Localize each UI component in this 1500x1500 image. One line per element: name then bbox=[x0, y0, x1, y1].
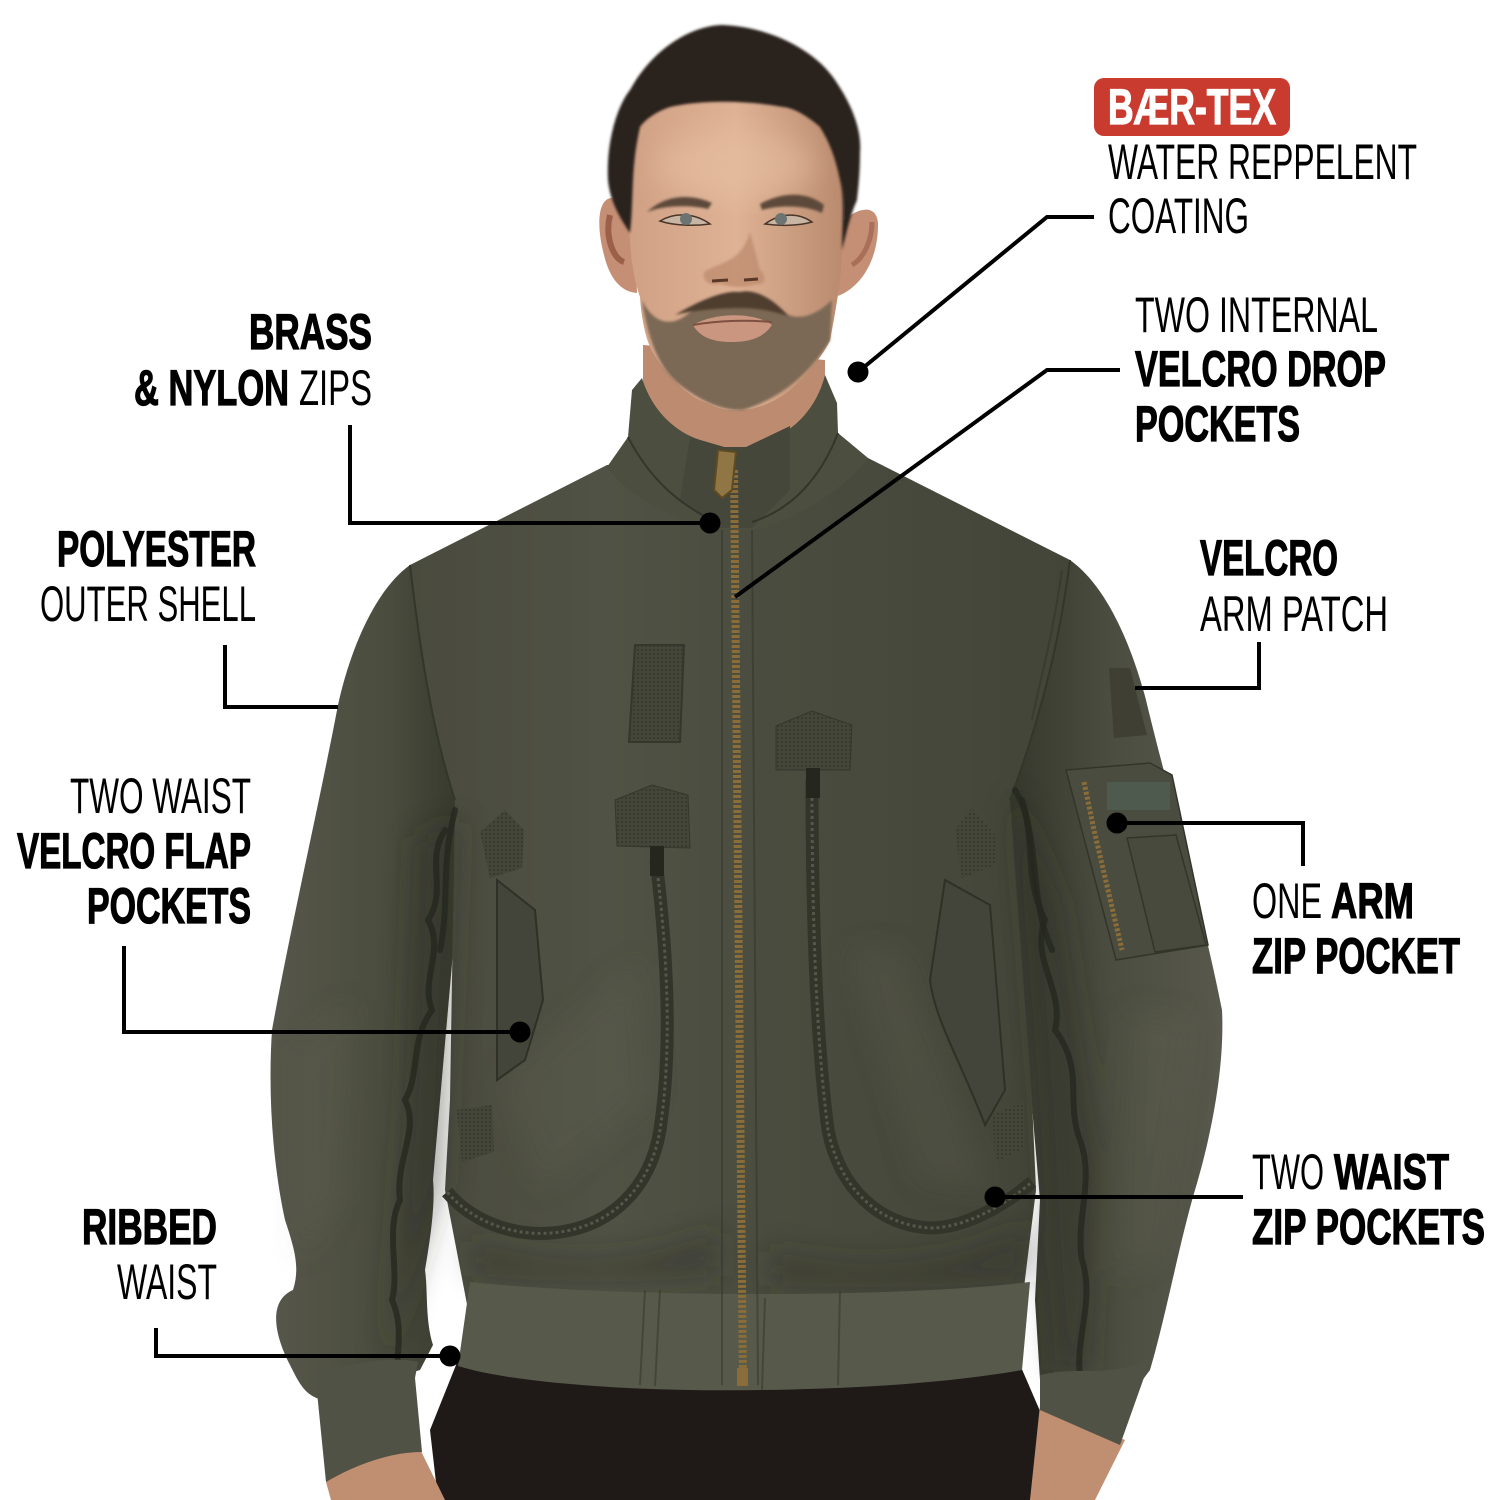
leader bbox=[156, 1328, 460, 1366]
text: & NYLON bbox=[134, 360, 289, 416]
right side tab bbox=[955, 808, 995, 878]
text: VELCRO FLAP bbox=[17, 823, 251, 879]
nose bbox=[704, 232, 765, 287]
right sleeve bbox=[1000, 560, 1222, 1410]
text: BRASS bbox=[249, 304, 372, 360]
text: ONE bbox=[1252, 873, 1322, 929]
right cuff bbox=[1040, 1355, 1152, 1445]
badge text: BÆR-TEX bbox=[1108, 79, 1276, 135]
callout: bar-tex water repellent coating bbox=[848, 78, 1417, 382]
text bbox=[134, 304, 372, 416]
right chest velcro flap bbox=[776, 711, 852, 770]
left sleeve bbox=[271, 565, 470, 1400]
beard bbox=[642, 295, 832, 410]
callout: brass and nylon zips bbox=[134, 304, 720, 534]
trousers bbox=[430, 1360, 1046, 1500]
leader bbox=[984, 1186, 1243, 1208]
callout: ribbed waist bbox=[82, 1199, 460, 1366]
text: ZIPS bbox=[299, 360, 372, 416]
waist rib panels bbox=[640, 1290, 840, 1390]
text bbox=[1252, 873, 1460, 984]
ears bbox=[599, 198, 878, 296]
left side tab bbox=[480, 810, 524, 878]
text: TWO WAIST bbox=[70, 768, 251, 824]
neck bbox=[643, 345, 825, 480]
centre brass zip bbox=[714, 450, 748, 1386]
callout: velcro flap pockets bbox=[17, 768, 530, 1042]
left chest velcro flap bbox=[615, 785, 690, 848]
text bbox=[82, 1199, 217, 1310]
badge bbox=[1094, 78, 1290, 136]
text: WAIST bbox=[1334, 1144, 1449, 1200]
collar bbox=[607, 375, 868, 532]
person wearing jacket bbox=[271, 25, 1222, 1500]
text: ARM bbox=[1331, 873, 1414, 929]
text bbox=[1252, 1144, 1485, 1255]
text: POCKETS bbox=[1135, 396, 1300, 452]
text: RIBBED bbox=[82, 1199, 217, 1255]
ribbed waist bbox=[458, 1282, 1030, 1390]
right wrist bbox=[1030, 1405, 1125, 1500]
leader bbox=[1106, 812, 1303, 866]
left sleeve ruching bbox=[392, 830, 445, 1375]
text: VELCRO bbox=[1200, 530, 1338, 586]
left waist zip pocket bbox=[447, 860, 667, 1233]
chest velcro patch bbox=[629, 645, 684, 742]
callout: arm zip pocket bbox=[1106, 812, 1460, 984]
face bbox=[627, 78, 844, 410]
arm velcro patch bbox=[1109, 668, 1147, 738]
leader bbox=[225, 645, 338, 707]
text: VELCRO DROP bbox=[1135, 341, 1386, 397]
right flap pocket bbox=[930, 880, 1005, 1125]
text bbox=[1135, 287, 1386, 452]
text bbox=[40, 521, 256, 632]
arm zip pocket bbox=[1066, 763, 1208, 960]
right waist zip pocket bbox=[812, 780, 1032, 1228]
left wrist bbox=[326, 1444, 445, 1500]
lips bbox=[693, 315, 772, 342]
text bbox=[1200, 530, 1388, 642]
sleeve seams bbox=[410, 565, 455, 800]
fabric folds bbox=[300, 790, 1190, 1370]
description: COATING bbox=[1108, 188, 1249, 244]
text bbox=[17, 768, 251, 934]
text: TWO bbox=[1252, 1144, 1324, 1200]
description bbox=[1108, 134, 1417, 244]
right sleeve ruching bbox=[1015, 790, 1086, 1375]
leader bbox=[1135, 642, 1259, 688]
text: POLYESTER bbox=[57, 521, 256, 577]
text: OUTER SHELL bbox=[40, 576, 256, 632]
centre placket bbox=[722, 530, 758, 1385]
main body bbox=[410, 458, 1070, 1320]
text: POCKETS bbox=[87, 878, 251, 934]
callout: velcro drop pockets bbox=[735, 287, 1386, 597]
text: WAIST bbox=[117, 1254, 217, 1310]
eyes bbox=[660, 215, 710, 225]
callout: waist zip pockets bbox=[984, 1144, 1485, 1255]
hair bbox=[608, 25, 860, 250]
leader bbox=[350, 425, 720, 534]
zip pullers bbox=[650, 768, 820, 876]
leader bbox=[124, 946, 530, 1042]
forehead highlight bbox=[655, 130, 815, 200]
callout: polyester outer shell bbox=[40, 521, 338, 707]
text: ARM PATCH bbox=[1200, 586, 1388, 642]
lower velcro tabs bbox=[457, 1102, 1024, 1162]
leader bbox=[735, 370, 1120, 597]
left flap pocket bbox=[497, 880, 543, 1080]
leader bbox=[848, 217, 1094, 382]
callout: velcro arm patch bbox=[1135, 530, 1388, 688]
eyebrows bbox=[647, 197, 712, 212]
inner collar bbox=[680, 426, 790, 528]
moustache bbox=[675, 291, 788, 316]
left cuff bbox=[315, 1360, 422, 1482]
